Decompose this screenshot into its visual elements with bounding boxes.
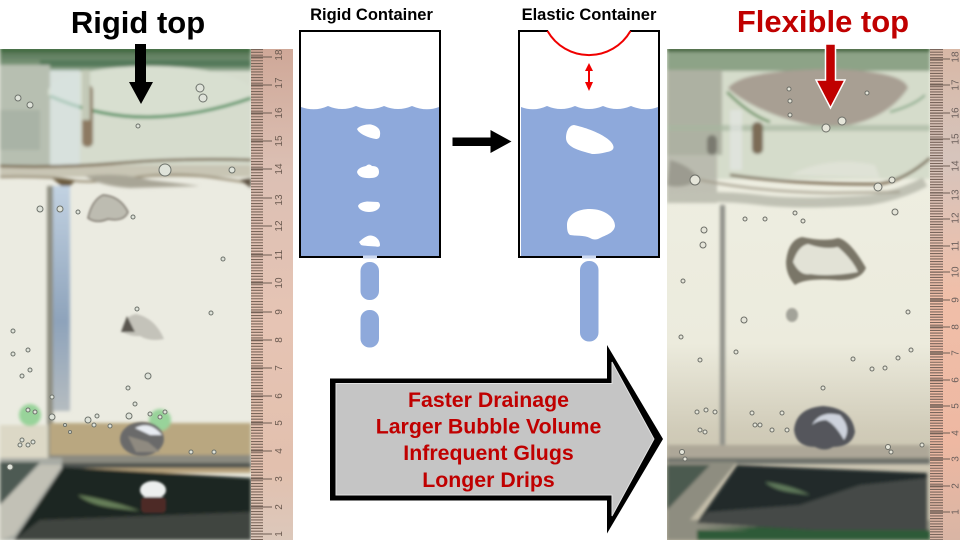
- air bubble (large upper, right photo): [786, 237, 866, 285]
- ruler (left photo): 8: [274, 337, 285, 343]
- drip (elastic): [580, 261, 598, 342]
- water (rigid): [301, 106, 439, 256]
- ruler (left photo): 16: [274, 107, 285, 119]
- outcome text: Larger Bubble Volume: [376, 414, 601, 438]
- small bubbles (left photo): [7, 84, 235, 470]
- air bubble (metallic, left photo): [120, 422, 164, 456]
- outcome text: Infrequent Glugs: [403, 441, 574, 465]
- ruler (left photo): 3: [274, 476, 285, 482]
- small bubbles (right photo): [679, 87, 924, 461]
- ruler (left photo): 2: [274, 504, 285, 510]
- flexible membrane: [548, 29, 630, 55]
- ruler (left photo): 13: [274, 194, 285, 206]
- ruler (right photo): [930, 49, 960, 540]
- heading: rigid top: Rigid top: [71, 5, 205, 40]
- air bubble (middle, left photo): [121, 314, 164, 340]
- ruler (left photo): 7: [274, 365, 285, 371]
- heading: rigid container: Rigid Container: [310, 6, 433, 24]
- ruler (left photo): 10: [274, 277, 285, 289]
- ruler (left photo): 15: [274, 135, 285, 147]
- ruler (left photo): 18: [274, 49, 285, 61]
- arrow: rigid to elastic: [452, 130, 512, 153]
- outcome text: Longer Drips: [422, 468, 555, 492]
- ruler (left photo): 5: [274, 420, 285, 426]
- ruler (left photo): 4: [274, 448, 285, 454]
- arrow body: [330, 345, 663, 534]
- drips (rigid): [360, 262, 379, 348]
- ruler (left photo): 14: [274, 163, 285, 175]
- callout arrow: outcomes: [330, 345, 663, 534]
- ruler (left photo): [251, 49, 293, 540]
- air bubble (small, right photo): [786, 308, 798, 322]
- ruler (left photo): 9: [274, 309, 285, 315]
- container outline (elastic): [519, 31, 659, 257]
- arrow: rigid top pointer: [129, 44, 153, 104]
- outcome text: Faster Drainage: [408, 388, 569, 412]
- ruler (left photo): 17: [274, 77, 285, 89]
- diagram: rigid container: [300, 31, 440, 348]
- arrow: flexible top pointer: [816, 44, 845, 108]
- bubbles (elastic): [566, 125, 615, 240]
- bubbles (rigid): [357, 124, 380, 247]
- air bubble (metallic, right photo): [794, 406, 855, 450]
- right photo: flexible top experiment: [667, 47, 960, 540]
- heading: flexible top: Flexible top: [737, 4, 909, 39]
- left photo: rigid top experiment: [0, 47, 293, 540]
- diagram: elastic container: [519, 29, 659, 342]
- outcome text: [376, 388, 601, 492]
- ruler (left photo): 11: [274, 249, 285, 260]
- container outline (rigid): [300, 31, 440, 257]
- water (elastic): [521, 106, 658, 256]
- ruler (left photo): 12: [274, 220, 285, 232]
- air bubble (bottom, left photo): [140, 481, 166, 513]
- outlet gap (elastic): [582, 256, 596, 258]
- ruler (left photo): 1: [274, 531, 285, 537]
- heading: elastic container: Elastic Container: [522, 6, 657, 24]
- double arrow: membrane motion: [585, 63, 593, 91]
- air bubble (upper, left photo): [88, 195, 128, 221]
- outlet gap (rigid): [363, 256, 377, 258]
- ruler (left photo): 6: [274, 393, 285, 399]
